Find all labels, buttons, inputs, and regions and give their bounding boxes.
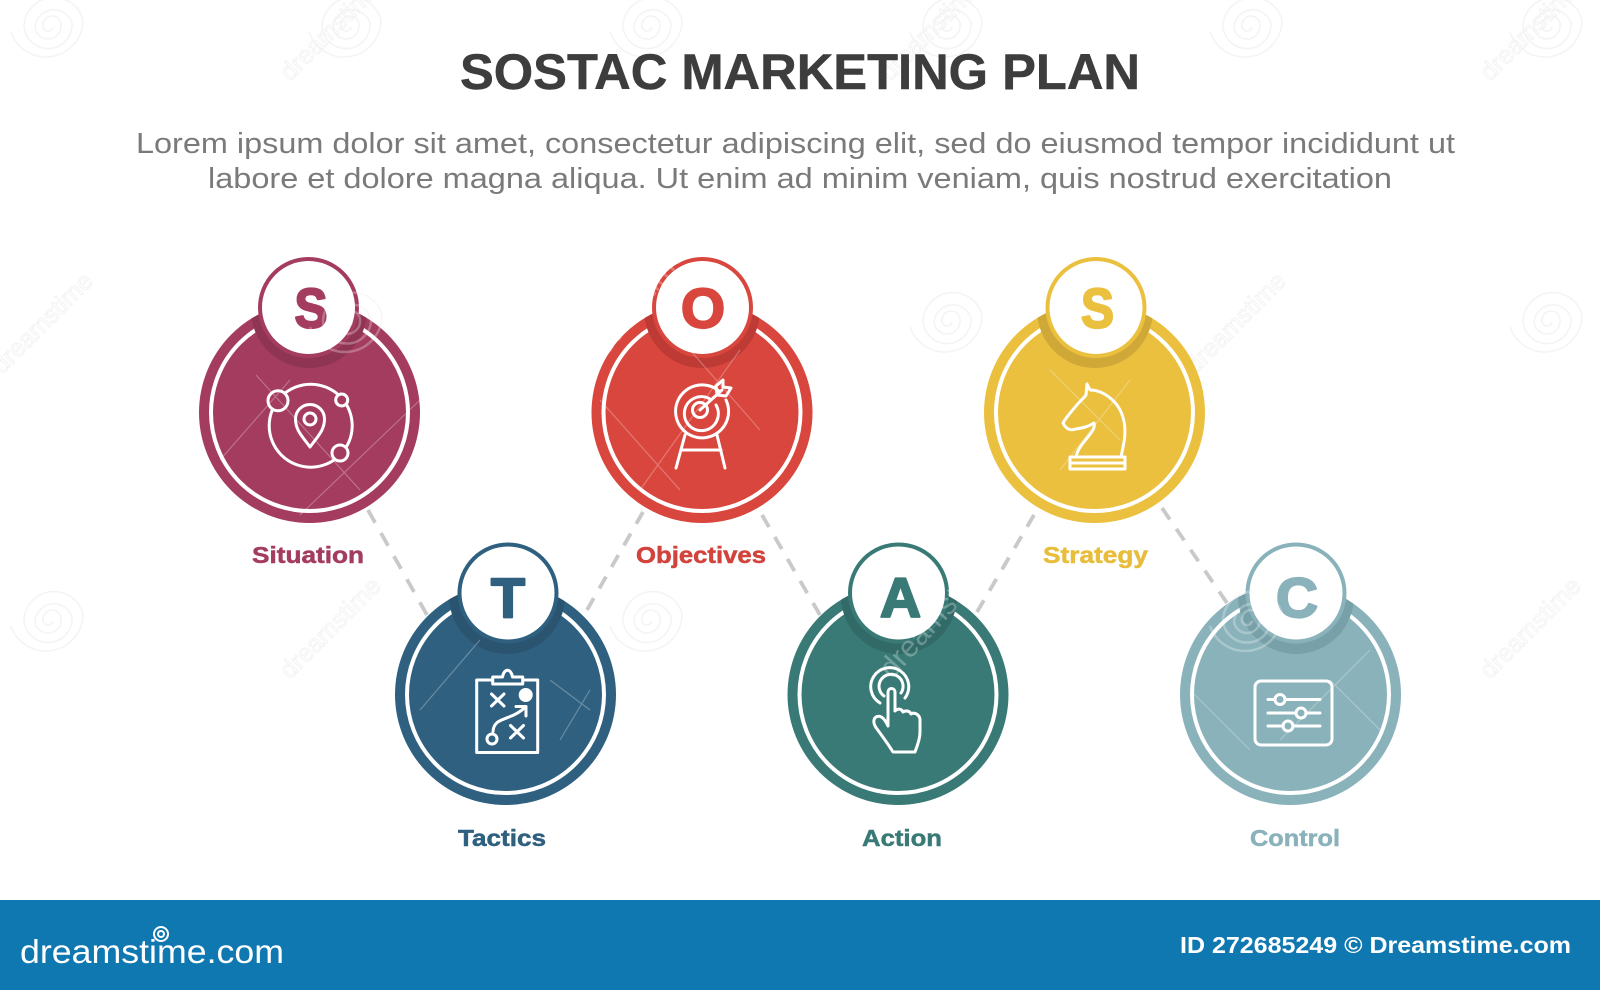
label: objectives: Objectives [636,542,766,568]
footer credit text: ID 272685249 © Dreamstime.com [1180,932,1571,958]
icon: chess knight [1063,384,1125,469]
panel: action [788,538,1008,851]
icon: tactics clipboard [477,670,538,752]
background watermark text: dreamstime [1474,572,1587,684]
badge: O [654,259,751,356]
watermark overlay on circles: dreamstime [873,546,1002,685]
panel: objectives [592,252,812,568]
dashed connectors [368,508,1227,615]
badge: S [260,259,357,356]
badge: T: T [491,566,525,629]
badge: S: S [1081,276,1114,340]
background watermark text: dreamstime [274,572,387,684]
badge: C [1248,544,1344,642]
icon: target on stand [676,380,731,468]
icon: pressing hand [871,668,920,752]
badge: C: C [1276,566,1318,629]
badge: T [460,544,556,642]
label: action: Action [862,825,942,851]
footer bar [0,900,1600,990]
badge: S [1048,259,1144,356]
icon: sliders panel [1255,681,1332,745]
watermark overlay on circles [220,238,1380,750]
background watermark text [0,0,1587,684]
watermark overlay on circles: dreamstime [570,238,692,382]
title: SOSTAC MARKETING PLAN [460,44,1140,100]
badge: A: A [880,566,921,629]
badge: A [850,544,947,642]
subtitle text block: Lorem ipsum dolor sit amet, consectetur adipiscing elit, sed do eiusmod tempor incididunt ut [136,128,1455,160]
panel: strategy [984,252,1205,568]
label: situation: Situation [252,542,364,568]
label: tactics: Tactics [458,825,546,851]
badge: O: O [681,276,725,340]
subtitle text block: labore et dolore magna aliqua. Ut enim ad minim veniam, quis nostrud exercitation [208,163,1392,195]
panel: situation [199,252,420,568]
panel: control [1180,538,1401,851]
background watermark spirals [11,0,1582,651]
background watermark text: dreamstime [1179,267,1292,379]
badge: S: S [294,276,328,340]
icon: logo swirl [154,927,168,941]
subtitle text block [136,128,1455,195]
label: strategy: Strategy [1043,542,1148,568]
footer logo text: dreamstime.com [20,933,284,970]
panel: tactics [395,538,616,851]
label: control: Control [1250,825,1340,851]
icon: location orbit [268,384,352,467]
